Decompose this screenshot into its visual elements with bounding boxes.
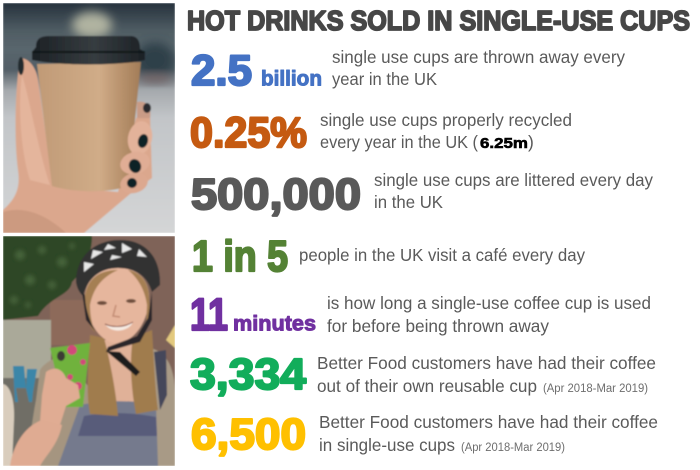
photo: hand holding a kraft paper cup — [3, 3, 175, 233]
stat: 11 minutes of use: is how long a single-use coffee cup is used — [327, 293, 651, 313]
stat: 0.25% properly recycled: every year in the UK ( — [320, 132, 478, 152]
stat: 3,334 reusable cups: out of their own reusable cup — [317, 376, 537, 396]
stat: 1 in 5 visit a cafe — [192, 232, 585, 281]
stat: 1 in 5 visit a cafe: 1 in 5 — [192, 232, 288, 281]
stat: 3,334 reusable cups: Better Food customers have had their coffee — [317, 353, 656, 373]
stat: 0.25% properly recycled: 0.25% — [190, 109, 307, 157]
stat: 11 minutes of use: for before being thrown away — [327, 316, 549, 336]
stat: 0.25% properly recycled: ) — [528, 132, 534, 152]
stat: 6,500 single-use cups — [191, 410, 658, 459]
photo: smiling woman in a cycle helmet holding a green cup — [3, 236, 175, 466]
stat: 3,334 reusable cups — [190, 350, 656, 399]
stat: 3,334 reusable cups: 3,334 — [190, 350, 307, 399]
stat: 11 minutes of use: 11 — [190, 289, 228, 340]
stat: 6,500 single-use cups: (Apr 2018-Mar 2019) — [461, 442, 565, 454]
stat: 500,000 littered: in the UK — [374, 192, 443, 212]
stat: 1 in 5 visit a cafe: people in the UK visit a café every day — [299, 245, 585, 265]
stat: 2.5 billion thrown away: billion — [261, 68, 322, 90]
stat: 0.25% properly recycled: 6.25m — [480, 135, 528, 152]
stat: 500,000 littered — [191, 170, 653, 219]
stat: 2.5 billion thrown away: single use cups are thrown away every — [332, 47, 625, 67]
stat: 6,500 single-use cups: 6,500 — [191, 410, 306, 459]
stat: 500,000 littered: 500,000 — [191, 170, 361, 219]
stat: 0.25% properly recycled: single use cups properly recycled — [320, 110, 572, 130]
stat: 11 minutes of use: minutes — [233, 312, 316, 336]
stat: 0.25% properly recycled — [190, 109, 572, 157]
stat: 2.5 billion thrown away: 2.5 — [191, 47, 252, 95]
stat: 6,500 single-use cups: in single-use cups — [319, 435, 455, 455]
stat: 3,334 reusable cups: (Apr 2018-Mar 2019) — [543, 383, 648, 395]
stat: 2.5 billion thrown away — [191, 47, 625, 95]
stat: 11 minutes of use — [190, 289, 651, 340]
stat: 500,000 littered: single use cups are littered every day — [374, 170, 653, 190]
stat: 6,500 single-use cups: Better Food customers have had their coffee — [319, 412, 658, 432]
stat: 2.5 billion thrown away: year in the UK — [332, 69, 437, 89]
